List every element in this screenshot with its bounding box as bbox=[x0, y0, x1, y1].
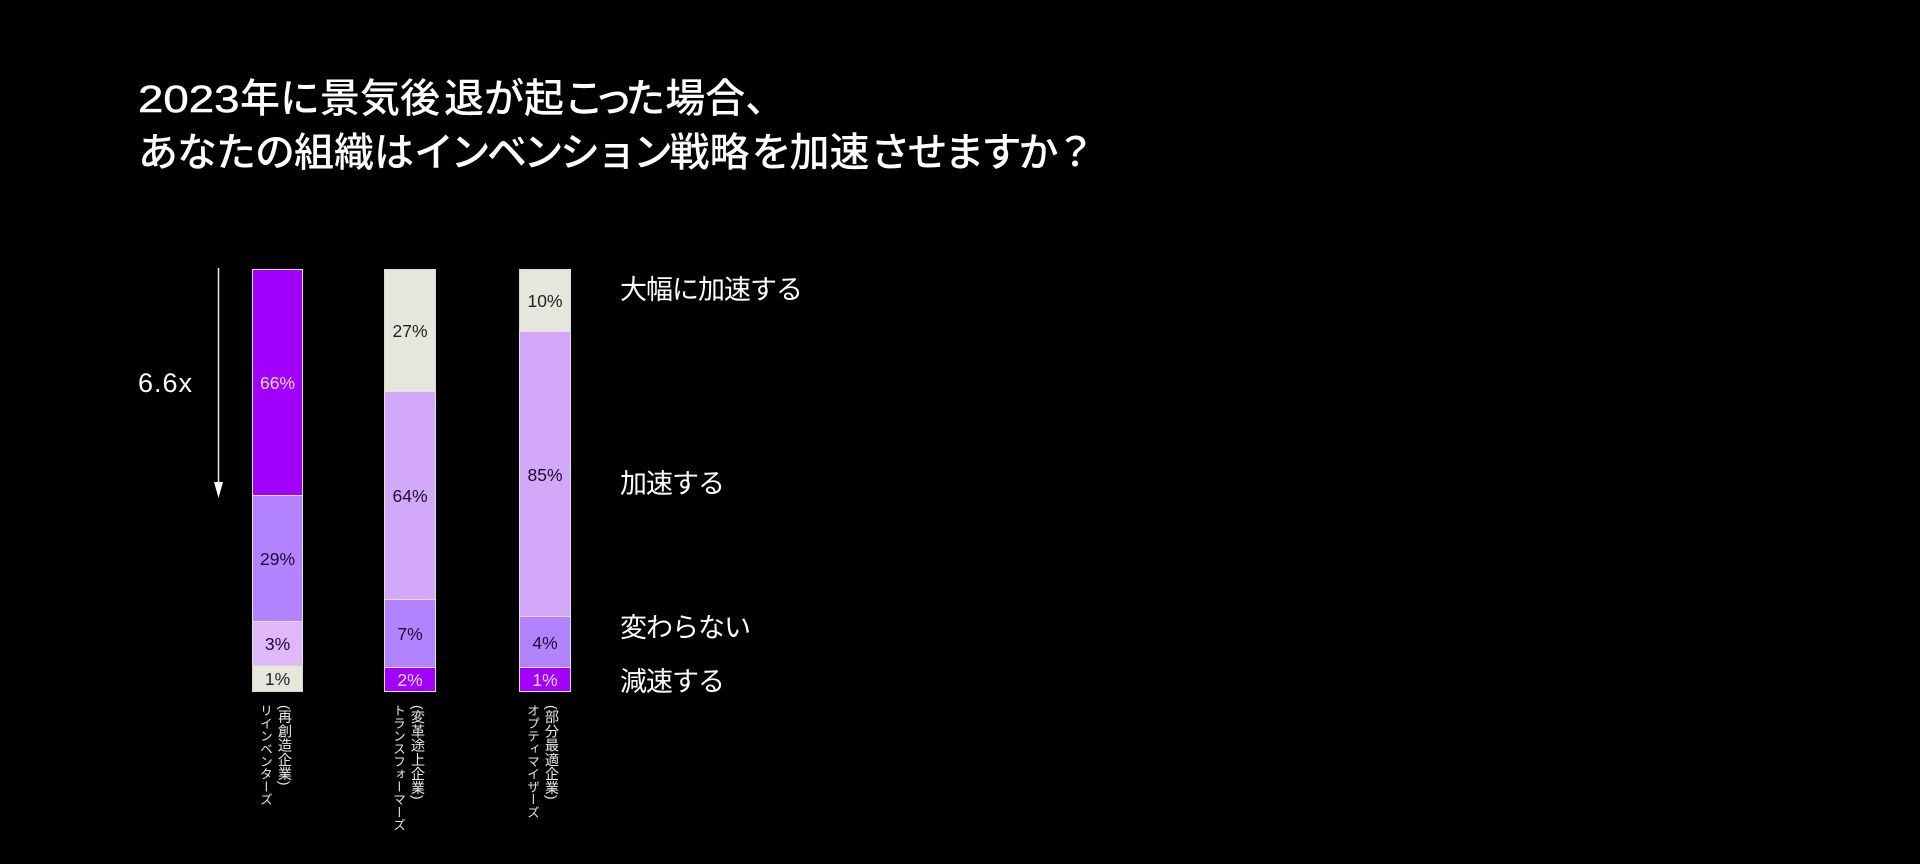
segment 4% bbox=[519, 616, 571, 668]
segment 7%: 7% bbox=[397, 624, 423, 644]
title: 年に景気後退が起こった場合、 bbox=[240, 77, 785, 121]
segment 1%: 1% bbox=[532, 670, 558, 690]
legend: decelerate: 減速する bbox=[620, 667, 724, 697]
segment 7% bbox=[384, 599, 436, 668]
bar: transformers bbox=[384, 269, 436, 692]
segment 29%: 29% bbox=[260, 549, 295, 569]
segment 85%: 85% bbox=[527, 464, 563, 484]
segment 27%: 27% bbox=[392, 321, 428, 341]
segment 10% bbox=[519, 269, 571, 332]
axis label: optimizers: オプティマイザーズ bbox=[525, 704, 539, 818]
bar: optimizers bbox=[519, 269, 571, 692]
segment 3%: 3% bbox=[265, 634, 290, 654]
axis label: optimizers: (部分最適企業) bbox=[543, 705, 559, 800]
segment 3% bbox=[252, 621, 303, 666]
axis label: reinventors: リインベンターズ bbox=[258, 704, 272, 806]
multiplier label: 6.6x: 6.6x bbox=[138, 368, 193, 398]
segment 2%: 2% bbox=[397, 670, 423, 690]
title bbox=[138, 77, 1096, 175]
legend: no change: 変わらない bbox=[620, 613, 750, 643]
segment 1% bbox=[252, 665, 303, 692]
title: あなたの組織はインベンション戦略を加速させますか？ bbox=[138, 131, 1096, 175]
axis label: reinventors bbox=[258, 704, 292, 806]
segment 10%: 10% bbox=[527, 291, 563, 311]
title: 2023 bbox=[138, 79, 239, 121]
segment 2% bbox=[384, 667, 436, 692]
segment 1% bbox=[519, 667, 571, 692]
bar: reinventors bbox=[252, 269, 303, 692]
axis label: transformers: (変革途上企業) bbox=[409, 705, 425, 800]
segment 27% bbox=[384, 269, 436, 392]
segment 85% bbox=[519, 331, 571, 617]
segment 64%: 64% bbox=[392, 486, 428, 506]
axis label: reinventors: (再創造企業) bbox=[276, 705, 292, 785]
axis label: transformers bbox=[391, 704, 425, 831]
segment 64% bbox=[384, 391, 436, 600]
legend: accelerate: 加速する bbox=[620, 469, 724, 499]
segment 1%: 1% bbox=[265, 669, 290, 689]
legend: greatly accelerate: 大幅に加速する bbox=[620, 275, 802, 305]
segment 66%: 66% bbox=[260, 373, 295, 393]
axis label: transformers: トランスフォーマーズ bbox=[391, 704, 405, 831]
segment 29% bbox=[252, 495, 303, 622]
segment 66% bbox=[252, 269, 303, 496]
arrow: 6.6x span downward bbox=[214, 268, 223, 498]
segment 4%: 4% bbox=[532, 632, 558, 652]
axis label: optimizers bbox=[525, 704, 559, 818]
